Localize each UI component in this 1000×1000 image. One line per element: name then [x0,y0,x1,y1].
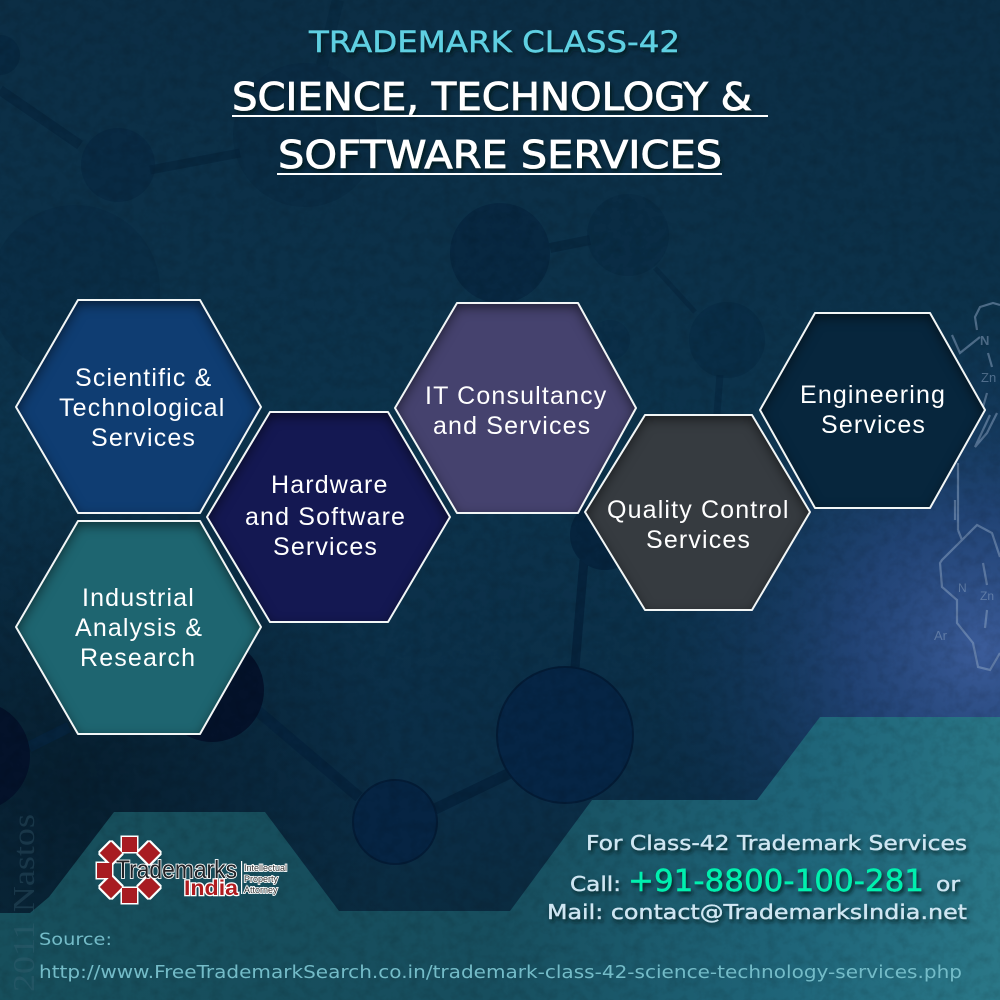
hexagon: Scientific & Technological Services [16,300,261,513]
title block [232,25,752,177]
hexagon: Scientific & Technological Services: Scientific & [75,364,212,392]
heading underlines [232,115,768,175]
subtitle: TRADEMARK CLASS-42 [308,25,680,59]
logo India: India [184,877,238,900]
logo gear mark [97,837,160,903]
logo tagline: Intellectual [244,863,287,873]
logo: Trademarks India [97,837,287,903]
chemical structure sketch: Zn [980,589,994,603]
chemical structure sketch: Zn [981,370,996,385]
logo wordmark: Trademarks [116,856,237,884]
logo tagline [241,861,287,895]
contact block [547,831,967,924]
chemical structure sketch: Ar [934,628,948,643]
hexagon: Engineering Services: Services [821,411,926,439]
hexagon: IT Consultancy and Services: and Services [433,412,591,440]
chemical structure sketch [934,303,1000,670]
heading line 2: SOFTWARE SERVICES [278,133,722,177]
hexagon: Hardware and Software Services: and Software [245,503,406,531]
mail line: Mail: contact@TrademarksIndia.net [547,900,967,924]
call label: Call: [570,872,621,896]
hexagon: Industrial Analysis & Research: Analysis & [75,614,203,642]
hexagon: Scientific & Technological Services: Technological [59,394,225,422]
hexagon: Quality Control Services: Services [646,526,751,554]
source url: http://www.FreeTrademarkSearch.co.in/trademark-class-42-science-technology-services.php [39,963,962,983]
molecule illustration [0,0,765,864]
hexagon: Quality Control Services: Quality Control [607,496,790,524]
heading line 1: SCIENCE, TECHNOLOGY & [232,75,752,119]
hexagon: IT Consultancy and Services: IT Consultancy [425,382,607,410]
watermark: 2011 Nastos [6,814,41,992]
footer teal panels [0,717,1000,1000]
hexagon: Scientific & Technological Services: Services [91,424,196,452]
phone number: +91-8800-100-281 [628,864,924,899]
hexagon: Hardware and Software Services [207,412,450,622]
source [39,930,962,983]
hexagon: Engineering Services: Engineering [800,381,946,409]
or: or [936,872,961,896]
hexagon: IT Consultancy and Services [395,303,636,513]
logo tagline: Property [244,874,279,884]
chemical structure sketch: N [958,581,967,595]
hexagon: Engineering Services [760,313,985,508]
hexagon: Industrial Analysis & Research [16,521,261,734]
hexagon: Industrial Analysis & Research: Research [80,644,196,672]
hexagon: Hardware and Software Services: Hardware [271,471,389,499]
chemical structure sketch: N [980,333,989,348]
services line: For Class-42 Trademark Services [586,831,967,855]
hexagon: Industrial Analysis & Research: Industrial [82,584,195,612]
hexagon: Quality Control Services [585,415,810,610]
source label: Source: [39,930,112,950]
hexagon: Hardware and Software Services: Services [273,533,378,561]
logo tagline: Attorney [244,885,278,895]
